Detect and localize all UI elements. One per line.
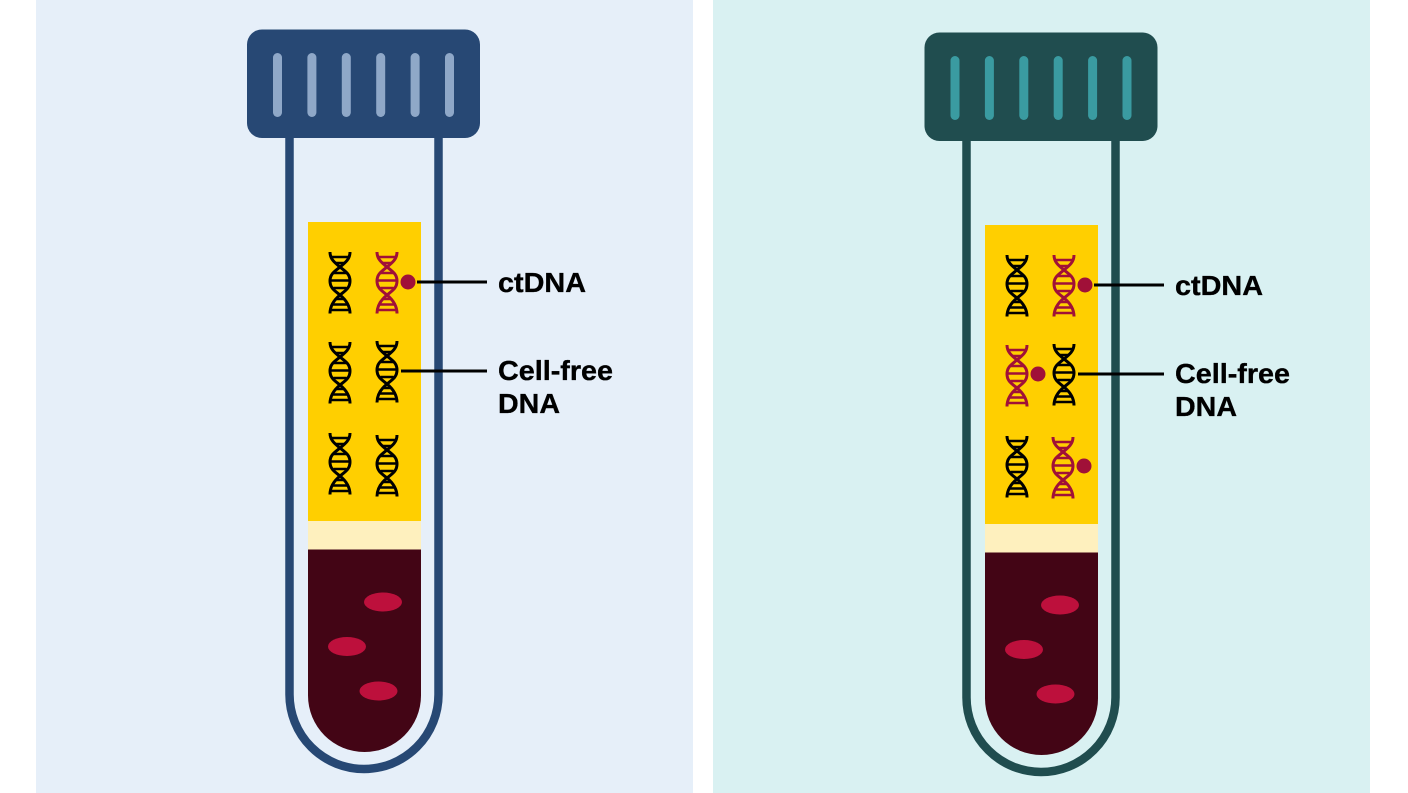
left tube red blood cells bbox=[328, 592, 402, 700]
left tube red blood cell layer bbox=[308, 550, 421, 752]
right label: cell-free DNA: DNA bbox=[1175, 391, 1237, 422]
right label: cell-free DNA: Cell-free bbox=[1175, 358, 1290, 389]
left tube buffy coat layer bbox=[308, 521, 421, 550]
left label: cell-free DNA: Cell-free bbox=[498, 355, 613, 386]
left test tube illustration bbox=[247, 30, 480, 769]
right test tube illustration bbox=[924, 32, 1158, 772]
right tube yellow plasma layer bbox=[985, 225, 1098, 524]
left tube glass outline bbox=[290, 130, 438, 769]
right tube tumour marker dots bbox=[1030, 278, 1092, 474]
right label: cell-free DNA bbox=[1078, 358, 1290, 422]
right tube cap bbox=[924, 32, 1158, 141]
left tube tumour marker dot bbox=[400, 274, 416, 290]
left label: cell-free DNA bbox=[401, 355, 613, 419]
left tube DNA fragments bbox=[330, 252, 397, 496]
left tube yellow plasma layer bbox=[308, 222, 421, 521]
right tube DNA fragments bbox=[1007, 255, 1074, 498]
panel: left background bbox=[36, 0, 693, 793]
right tube red blood cell layer bbox=[985, 552, 1098, 755]
right label: ctDNA: ctDNA bbox=[1175, 270, 1263, 301]
panel: right background bbox=[713, 0, 1370, 793]
right tube glass outline bbox=[966, 133, 1116, 772]
left label: ctDNA: ctDNA bbox=[498, 267, 586, 298]
right tube buffy coat layer bbox=[985, 524, 1098, 553]
left tube cap bbox=[247, 30, 480, 138]
left label: cell-free DNA: DNA bbox=[498, 388, 560, 419]
right tube red blood cells bbox=[1005, 596, 1079, 704]
